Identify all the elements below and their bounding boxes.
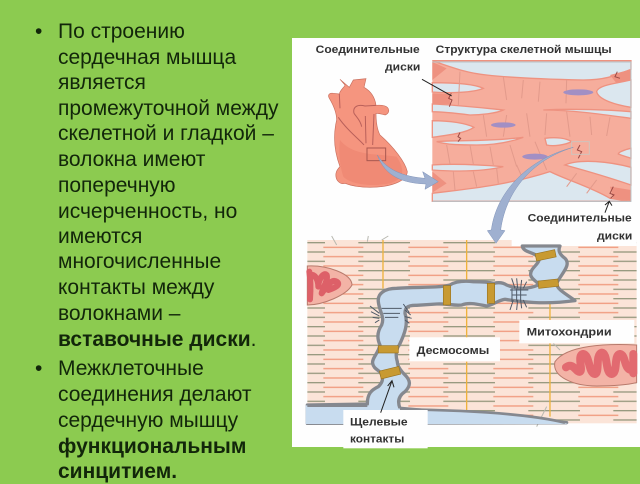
Z-lines <box>383 240 550 417</box>
detail diagram of the intercalated disc <box>306 230 637 448</box>
label: gap junctions: Щелевые <box>350 417 408 429</box>
gaps between muscle fibers <box>432 61 631 201</box>
bullet paragraph: structure of the cardiac muscle: промежуточной между <box>58 97 278 120</box>
bullet paragraph: structure of the cardiac muscle <box>35 20 278 351</box>
nuclei <box>563 89 593 95</box>
bullet paragraph: structure of the cardiac muscle: сердечная мышца <box>58 46 236 69</box>
label: connecting discs bottom: Соединительные <box>528 213 632 225</box>
bullet paragraph: functional syncytium: сердечную мышцу <box>58 409 238 432</box>
label: gap junctions <box>343 410 428 448</box>
arrow: lower label to disc <box>605 201 612 213</box>
arrow: gap junction pointer <box>381 381 394 413</box>
bullet paragraph: functional syncytium: синцитием. <box>58 460 177 483</box>
bullet paragraph: functional syncytium: • <box>35 357 42 380</box>
label: gap junctions: контакты <box>350 434 404 446</box>
bullet paragraph: functional syncytium: Межклеточные <box>58 357 204 380</box>
bullet paragraph: functional syncytium: функциональным <box>58 435 246 458</box>
bullet paragraph: structure of the cardiac muscle: волокна имеют <box>58 148 205 171</box>
label: mitochondria: Митохондрии <box>527 326 612 338</box>
text column <box>35 20 278 483</box>
desmosomes <box>370 278 528 323</box>
upper part of the illustration <box>316 44 632 243</box>
bullet paragraph: structure of the cardiac muscle: контакты между <box>58 276 214 299</box>
white picture background <box>292 38 640 447</box>
mitochondrion right <box>555 344 637 386</box>
bullet paragraph: structure of the cardiac muscle: волокнами – <box>58 302 180 325</box>
bullet paragraph: structure of the cardiac muscle: исчерченность, но <box>58 200 237 223</box>
bullet paragraph: structure of the cardiac muscle: многочисленные <box>58 250 221 273</box>
mitochondrion left <box>307 266 352 305</box>
heart <box>329 79 407 187</box>
label: connecting discs top: диски <box>385 62 420 74</box>
label: connecting discs top <box>316 44 420 74</box>
arrow: heart to skeletal panel <box>377 155 438 189</box>
label: desmosomes: Десмосомы <box>417 345 489 357</box>
label: connecting discs bottom: диски <box>597 231 632 243</box>
bullet paragraph: structure of the cardiac muscle: • <box>35 20 42 43</box>
fiber cross lines <box>447 72 610 193</box>
intercellular gap <box>306 246 575 424</box>
arrow: skeletal panel to detail <box>487 147 573 243</box>
bullet paragraph: structure of the cardiac muscle: является <box>58 71 146 94</box>
label: mitochondria <box>519 320 634 343</box>
bullet paragraph: structure of the cardiac muscle: скелетной и гладкой – <box>58 122 274 145</box>
label: skeletal muscle structure: Структура скелетной мышцы <box>436 44 612 56</box>
bullet paragraph: functional syncytium <box>35 357 252 483</box>
skeletal muscle panel <box>432 61 631 201</box>
darker fiber ends <box>432 62 631 201</box>
bullet paragraph: structure of the cardiac muscle: вставочные диски. <box>58 328 256 351</box>
label: desmosomes <box>409 337 500 361</box>
connecting disc marks <box>449 72 620 198</box>
bullet paragraph: structure of the cardiac muscle: По строению <box>58 20 185 43</box>
striped sarcomere background <box>307 240 637 423</box>
arrow: label to disc <box>422 79 452 96</box>
label: connecting discs top: Соединительные <box>316 44 420 56</box>
bullet paragraph: functional syncytium: соединения делают <box>58 383 252 406</box>
bullet paragraph: structure of the cardiac muscle: поперечную <box>58 174 176 197</box>
label: connecting discs bottom <box>528 213 632 243</box>
bullet paragraph: structure of the cardiac muscle: имеются <box>58 225 142 248</box>
gap junctions <box>378 250 559 379</box>
